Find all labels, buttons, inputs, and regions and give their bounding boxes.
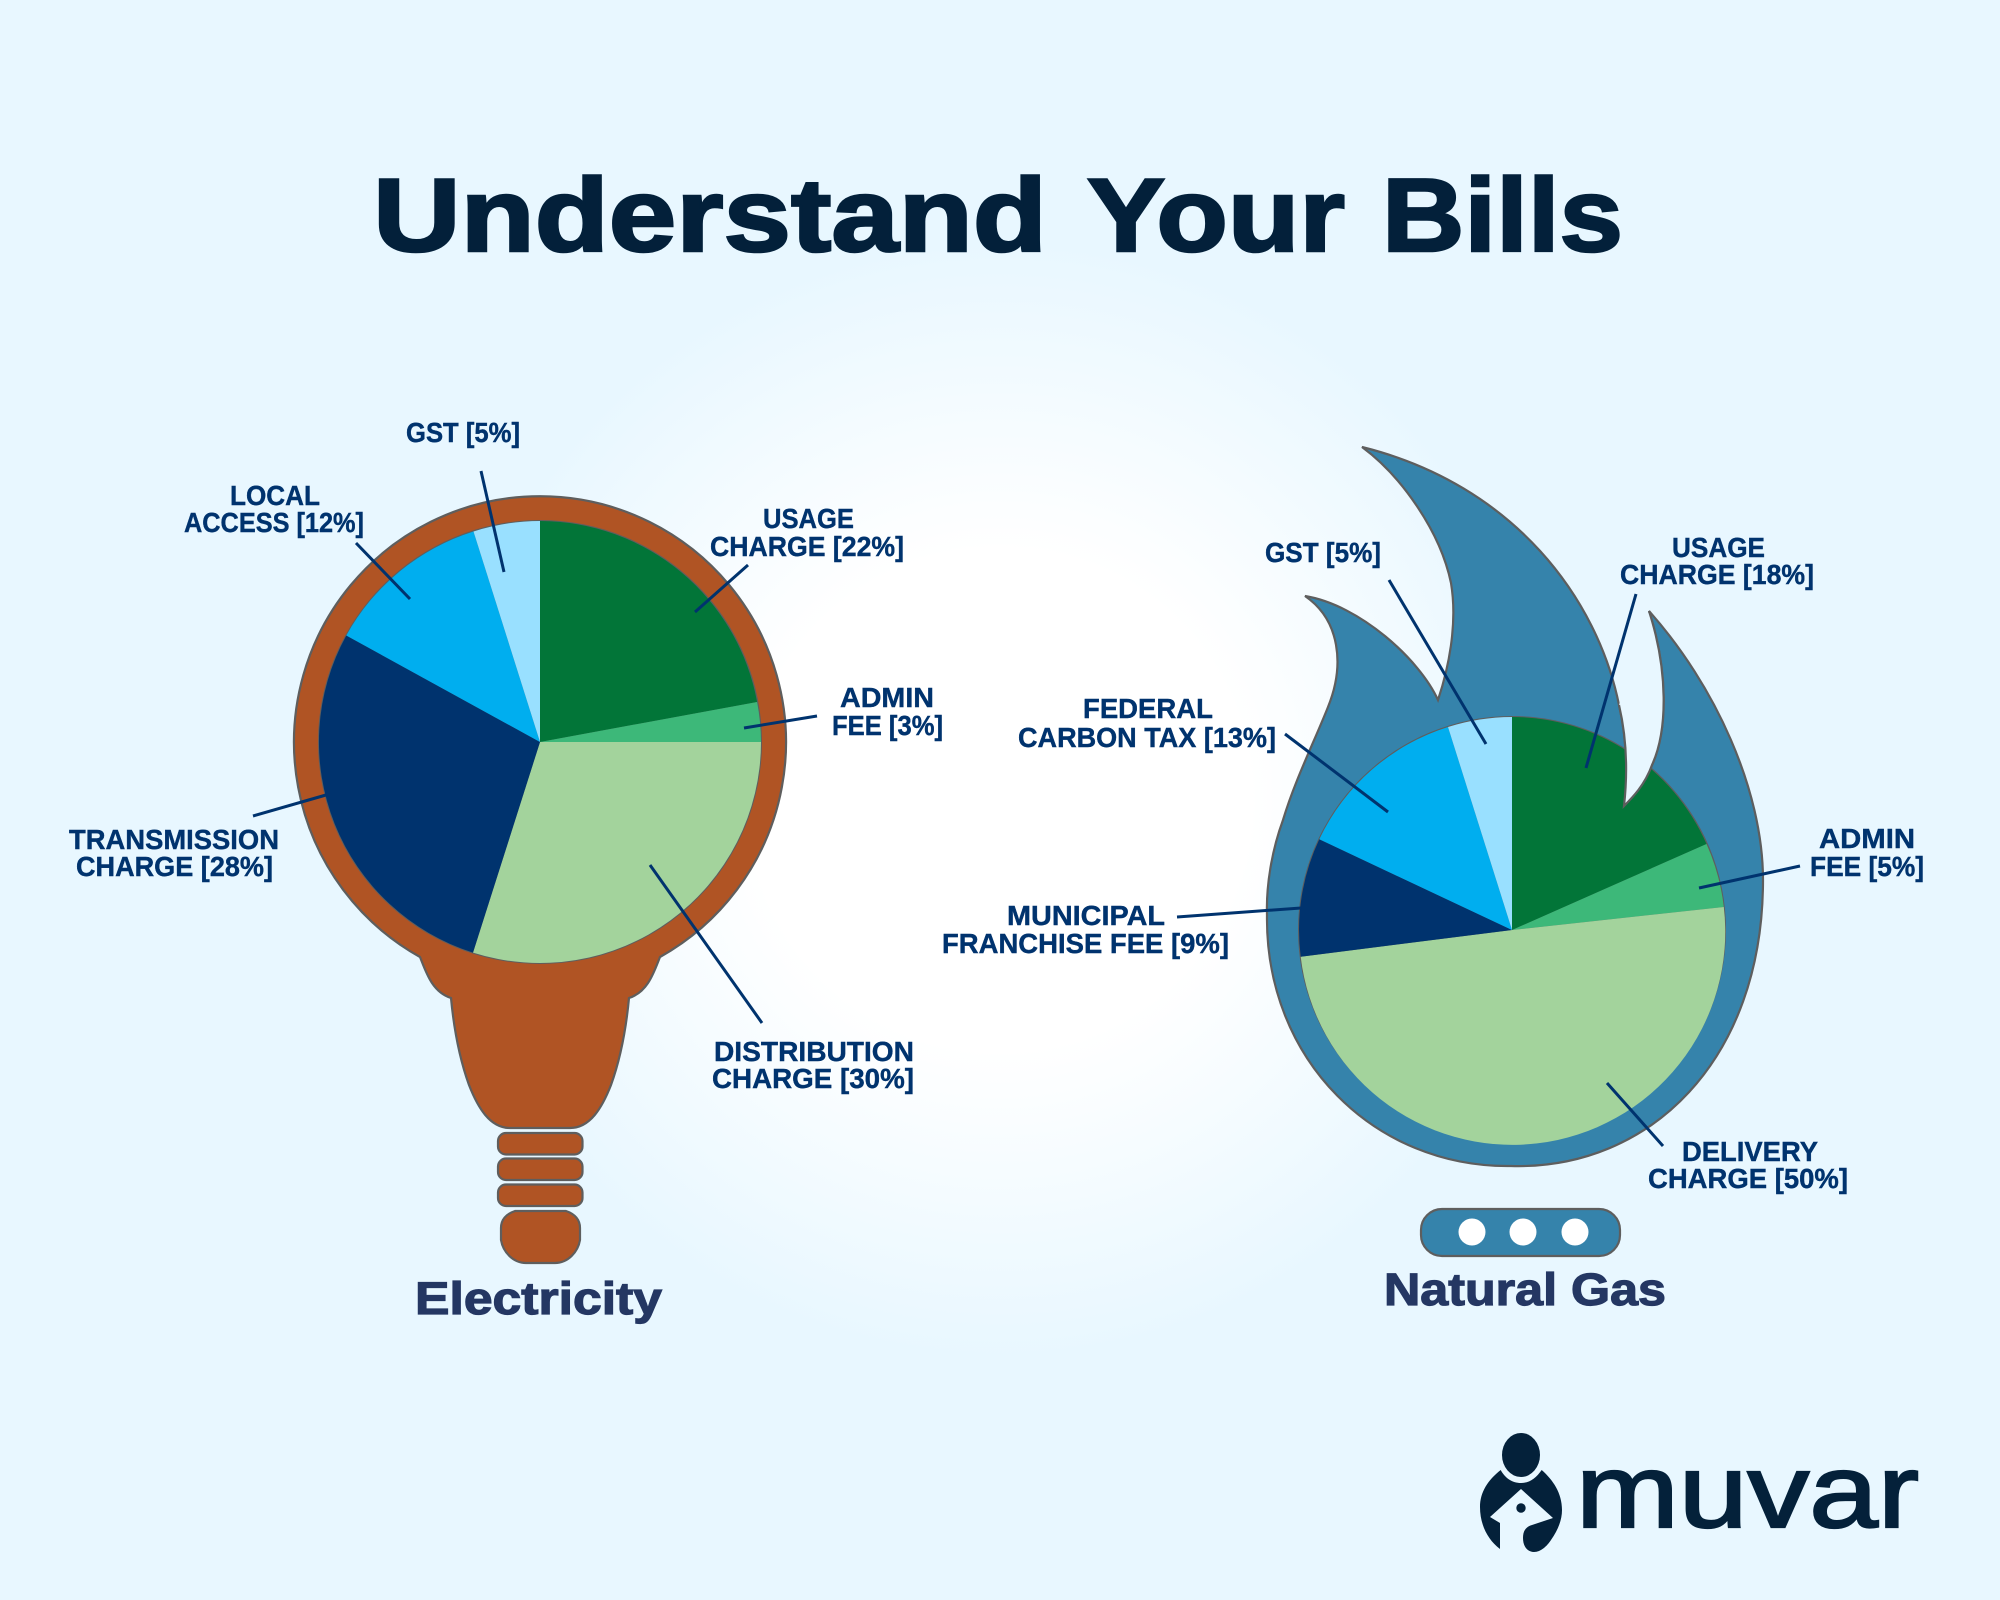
- icon: bulb screw rings: [498, 1133, 582, 1263]
- label: federal carbon tax 13%: FEDERAL: [1083, 693, 1213, 724]
- label: gst 5%: [1265, 537, 1486, 744]
- label: transmission charge 28%: CHARGE [28%]: [76, 851, 273, 882]
- label: transmission charge 28%: [69, 795, 326, 882]
- label: admin fee 3%: [744, 682, 943, 741]
- label: local access 12%: LOCAL: [230, 480, 320, 511]
- heading: electricity: Electricity: [415, 1273, 662, 1324]
- label: admin fee 3%: FEE [3%]: [832, 710, 943, 741]
- label: usage charge 18%: USAGE: [1672, 532, 1765, 563]
- label: local access 12%: ACCESS [12%]: [184, 507, 364, 538]
- label: usage charge 18%: CHARGE [18%]: [1620, 559, 1814, 590]
- wordmark: muvar: [1576, 1434, 1919, 1550]
- label: usage charge 18%: [1586, 532, 1814, 768]
- label: distribution charge 30%: [650, 865, 914, 1094]
- icon: light bulb body: [294, 496, 786, 1128]
- icon: flame notch over pie: [1619, 611, 1664, 806]
- heading: natural gas: Natural Gas: [1384, 1264, 1666, 1315]
- label: delivery charge 50%: CHARGE [50%]: [1648, 1163, 1848, 1194]
- panel: electricity bulb: [69, 417, 943, 1324]
- icon: muvar person and house: [1480, 1433, 1562, 1552]
- title: Understand: [373, 158, 1047, 274]
- label: gst 5%: GST [5%]: [1265, 537, 1381, 568]
- label: municipal franchise fee 9%: [942, 900, 1301, 959]
- label: delivery charge 50%: DELIVERY: [1682, 1136, 1818, 1167]
- pie chart: electricity: [318, 520, 762, 964]
- label: municipal franchise fee 9%: MUNICIPAL: [1007, 900, 1165, 931]
- label: usage charge 22%: [695, 503, 904, 612]
- title: [373, 158, 1623, 274]
- label: admin fee 5%: [1699, 823, 1924, 888]
- label: admin fee 5%: FEE [5%]: [1810, 851, 1924, 882]
- title: Your: [1087, 158, 1345, 274]
- panel: natural gas flame: [942, 447, 1924, 1315]
- label: admin fee 5%: ADMIN: [1819, 823, 1915, 854]
- label: usage charge 22%: USAGE: [763, 503, 854, 534]
- label: distribution charge 30%: CHARGE [30%]: [712, 1063, 914, 1094]
- pie chart: natural gas: [1298, 716, 1726, 1145]
- label: admin fee 3%: ADMIN: [840, 682, 934, 713]
- label: usage charge 22%: CHARGE [22%]: [710, 531, 904, 562]
- label: transmission charge 28%: TRANSMISSION: [69, 824, 279, 855]
- label: gst 5%: [406, 417, 520, 572]
- icon: gas burner: [1421, 1209, 1620, 1256]
- logo: muvar: [1480, 1433, 1919, 1552]
- label: municipal franchise fee 9%: FRANCHISE FEE [9%]: [942, 928, 1229, 959]
- label: distribution charge 30%: DISTRIBUTION: [714, 1036, 914, 1067]
- label: federal carbon tax 13%: [1018, 693, 1388, 812]
- label: local access 12%: [184, 480, 410, 599]
- label: delivery charge 50%: [1607, 1083, 1848, 1194]
- label: federal carbon tax 13%: CARBON TAX [13%]: [1018, 722, 1276, 753]
- icon: flame body: [1267, 447, 1763, 1166]
- title: Bills: [1382, 158, 1623, 274]
- label: gst 5%: GST [5%]: [406, 417, 520, 448]
